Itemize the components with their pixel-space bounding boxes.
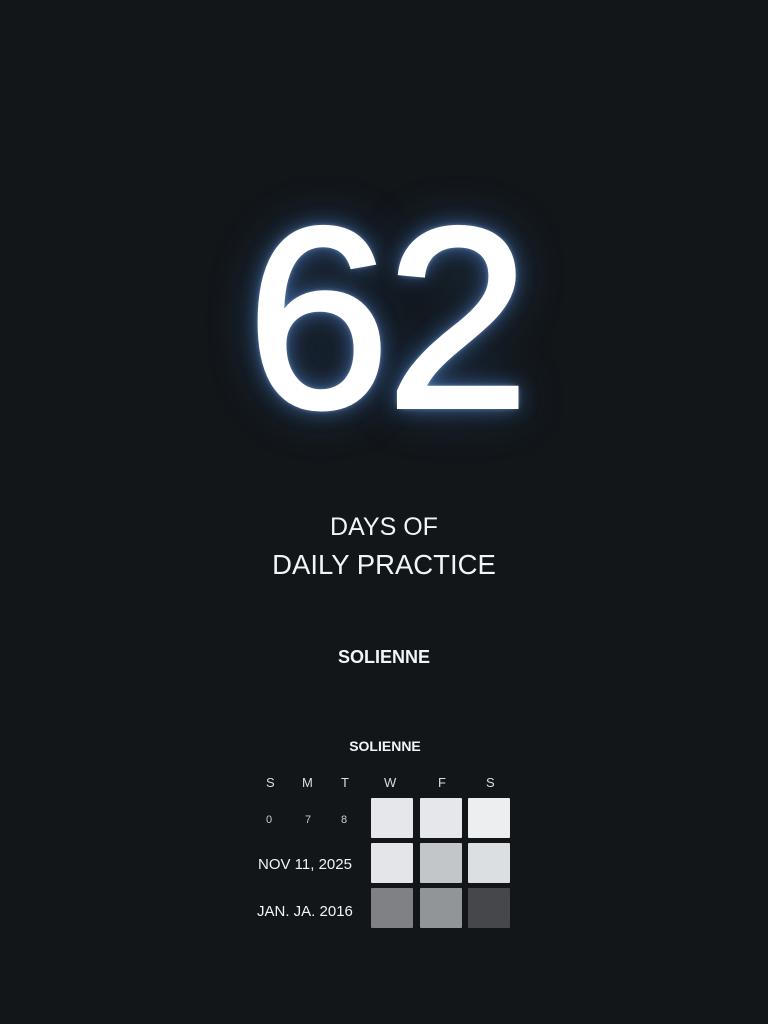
weekday labels: M bbox=[302, 775, 313, 790]
subtitle: DAYS OF bbox=[330, 513, 438, 541]
weekday labels: S bbox=[486, 775, 495, 790]
name: SOLIENNE bbox=[338, 647, 430, 667]
weekday labels: W bbox=[384, 775, 396, 790]
heatmap squares bbox=[371, 798, 510, 928]
date labels: NOV 11, 2025 bbox=[258, 856, 352, 873]
calendar: 8 bbox=[341, 814, 347, 826]
calendar: JAN. JA. 2016 bbox=[257, 903, 353, 920]
calendar: 7 bbox=[305, 814, 311, 826]
calendar bbox=[257, 738, 510, 928]
weekday labels: S bbox=[266, 775, 275, 790]
weekday labels bbox=[266, 775, 495, 790]
calendar: 0 bbox=[266, 814, 272, 826]
subtitle: DAILY PRACTICE bbox=[272, 549, 496, 580]
day numbers bbox=[266, 814, 347, 826]
weekday labels: T bbox=[341, 775, 349, 790]
weekday labels: F bbox=[438, 775, 446, 790]
calendar title: SOLIENNE bbox=[349, 738, 421, 754]
subtitle bbox=[272, 513, 496, 580]
big number 62: 62 bbox=[246, 173, 525, 462]
